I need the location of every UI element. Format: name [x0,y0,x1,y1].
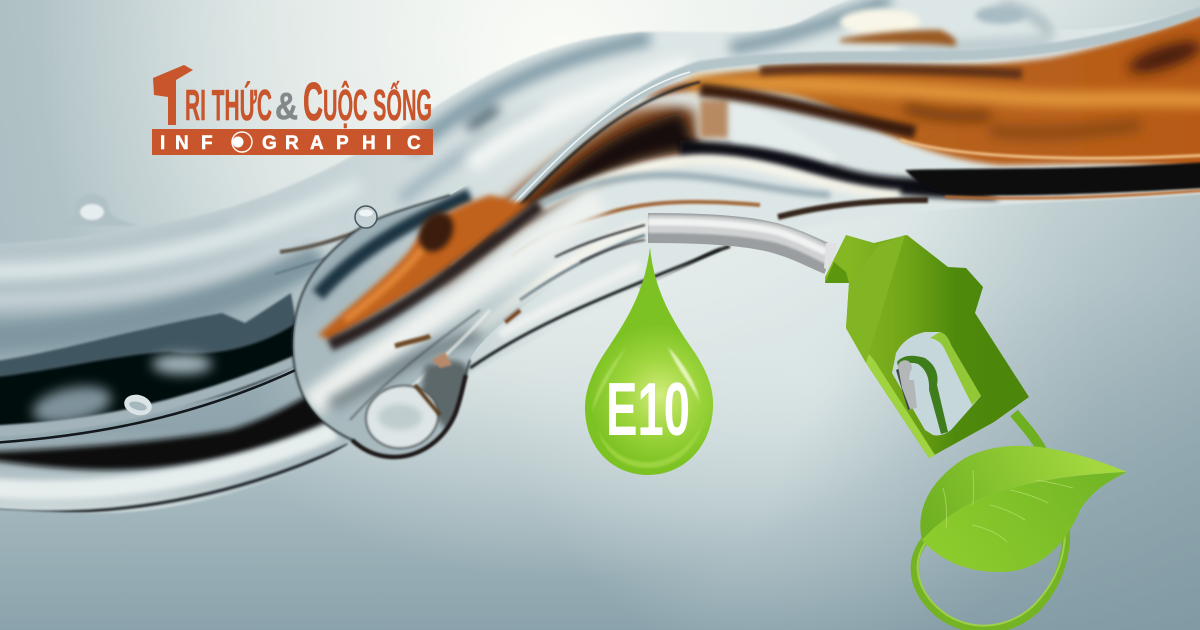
green fuel nozzle [825,235,1029,458]
pale swooshes [0,0,1050,338]
fuel hose and ring [915,413,1066,629]
logo wordmark: RI THỨC [185,80,272,130]
infographic banner [152,129,433,155]
trigger pin [898,360,917,409]
leaf veins [943,470,1073,542]
thin streaks left of the drop [275,232,357,274]
fuel nozzle spout [648,222,837,272]
black upper band at left [0,293,300,443]
E10 label: E10 [606,367,690,451]
infographic banner: INF [160,133,213,154]
water droplets [60,194,377,418]
hanging glass drop with orange reflection [290,185,614,461]
infographic banner: GRAPHIC [262,133,421,154]
contour lines and lower streaks [450,72,928,368]
logo wordmark: & [275,86,298,128]
leaf [920,446,1127,572]
E10 green drop [585,247,713,475]
glass tube highlight [450,6,1200,262]
logo wordmark: C [303,72,323,132]
logo T mark [153,65,193,125]
brown dark reflection band [440,100,1000,295]
infographic scene: UỘC SỐNG [323,79,432,130]
nozzle trigger opening [892,332,981,435]
crest with brown reflection [840,6,1025,46]
logo wordmark [185,72,432,132]
black lower band at left [0,385,348,512]
black base of orange stream [905,162,1200,196]
logo: Tri Thuc & Cuoc Song Infographic [152,65,433,155]
trigger lever [897,356,948,434]
orange fuel stream [640,12,1200,170]
